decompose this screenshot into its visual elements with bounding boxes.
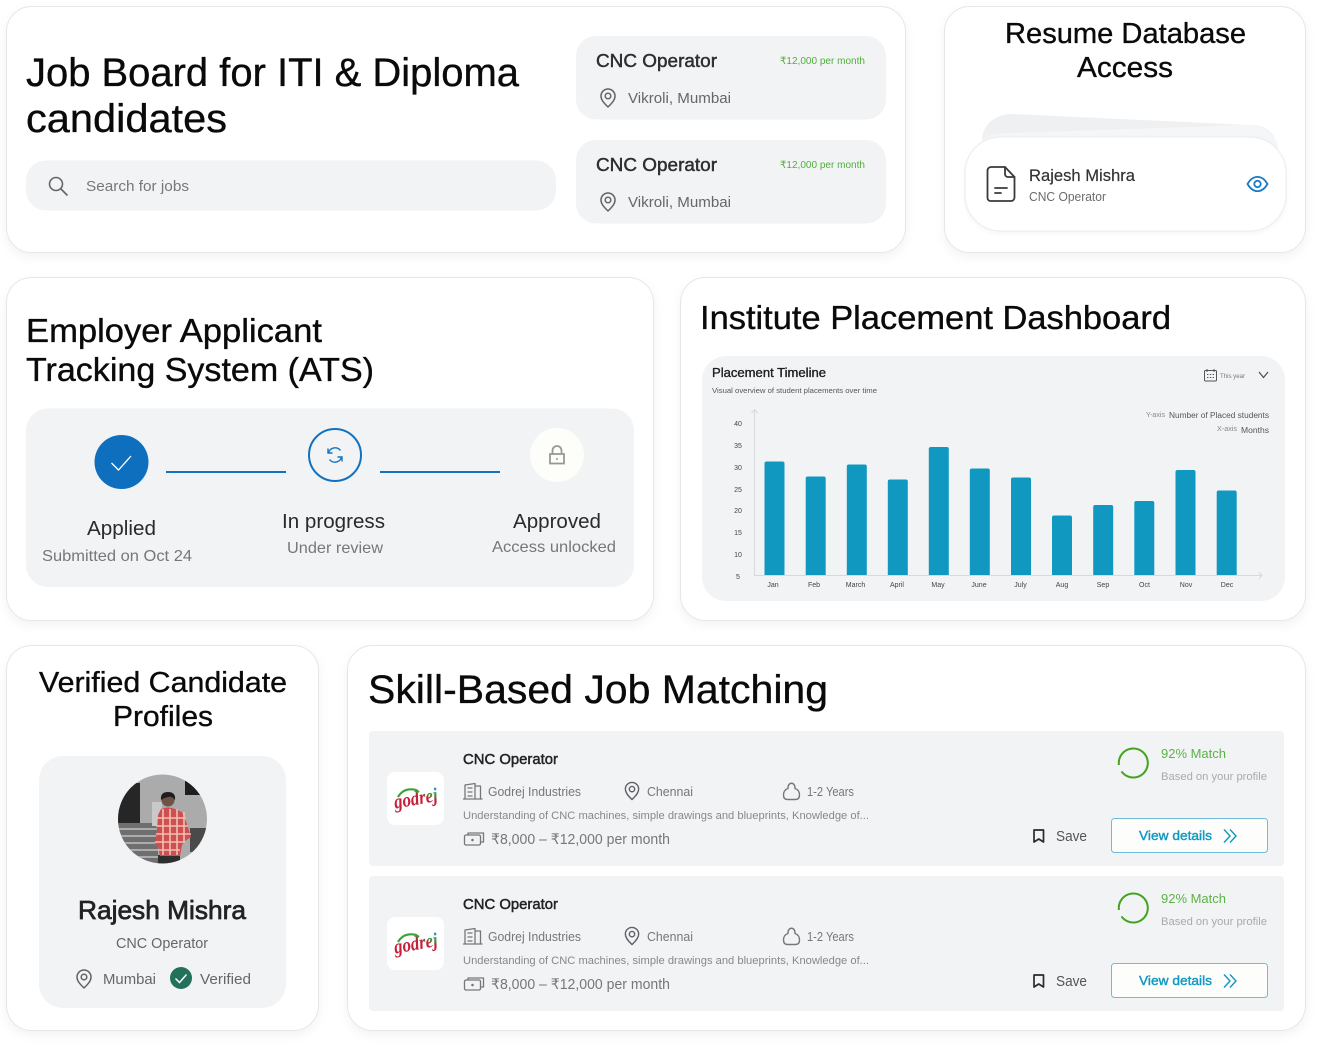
step: in progress [282,429,385,557]
location: Chennai [647,930,693,944]
heading: job board: candidates [26,97,227,141]
heading: resume database: Resume Database [1005,18,1246,50]
bar chart: June [971,582,987,589]
job card 2: Vikroli, Mumbai [628,194,731,211]
heading: job board: Job Board for ITI & Diploma [26,51,520,95]
axis legend: X-axis [1217,426,1238,433]
experience [784,928,854,944]
bar chart: 15 [734,530,742,537]
bar chart: 40 [734,421,742,428]
heading: ATS: Tracking System (ATS) [26,351,374,388]
bar chart: Sep [1097,582,1109,589]
profile card: CNC Operator [116,936,208,952]
connector 1 [166,471,286,473]
resume card: CNC Operator [1029,190,1106,204]
chart title [712,366,877,395]
heading: ATS: Employer Applicant [26,312,322,349]
heading: ATS [26,312,374,388]
location [77,970,156,988]
job card 2: CNC Operator [596,155,717,175]
bar chart: 30 [734,465,742,472]
stacked card backs [982,114,1278,150]
panel: placement dashboard [680,278,1306,620]
save [1034,829,1087,845]
bar chart: 35 [734,443,742,450]
view details button [1112,964,1268,998]
match score [1117,746,1267,783]
chart title: Visual overview of student placements over time [712,386,877,395]
panel: applicant tracking [6,278,654,620]
company logo: godrej [391,784,440,814]
bar chart: Feb [808,582,820,589]
bar chart: May [931,582,945,589]
resume card [965,137,1286,231]
chart title: Placement Timeline [712,366,826,380]
job match row 2 [369,876,1284,1011]
company logo: godrej [391,929,440,959]
save [1034,974,1087,990]
step: approved: Approved [513,511,601,533]
step: in progress: Under review [287,540,383,557]
bar chart: Nov [1180,582,1193,589]
save: Save [1056,974,1087,990]
view details button [1112,818,1268,852]
date filter [1204,369,1268,381]
axis legend: Y-axis [1146,412,1165,419]
description: Understanding of CNC machines, simple drawings and blueprints, Knowledge of... [463,810,869,822]
match score: Based on your profile [1161,916,1267,928]
job match row 1: CNC Operator [463,752,558,768]
step: applied: Submitted on Oct 24 [42,548,192,565]
job card 1: ₹12,000 per month [780,56,865,67]
company: Godrej Industries [488,930,581,944]
location: Mumbai [103,971,156,988]
profile card [39,756,286,1008]
match score: 92% Match [1161,891,1226,906]
bar chart: April [890,582,904,589]
heading: verified profiles: Profiles [113,701,213,733]
experience [784,783,854,800]
icon: document [988,167,1014,201]
profile card: Rajesh Mishra [78,895,247,925]
date filter: This year [1220,374,1245,380]
panel: resume database [944,6,1306,252]
axis legend [1146,411,1269,435]
job card 1 [576,36,886,120]
panel: job board [6,6,906,252]
bar chart: 10 [734,552,742,559]
company logo [387,917,444,970]
heading: resume database: Access [1077,52,1173,84]
search bar: Search for jobs [86,178,189,195]
save: Save [1056,829,1087,845]
location [625,927,693,945]
heading: verified profiles: Verified Candidate [39,667,287,699]
location [625,782,693,800]
connector 2 [380,471,500,473]
match score: 92% Match [1161,746,1226,761]
location: Chennai [647,785,693,799]
description: Understanding of CNC machines, simple drawings and blueprints, Knowledge of... [463,955,869,967]
verified badge: Verified [200,971,251,988]
job card 1: Vikroli, Mumbai [628,90,731,107]
step: applied: Applied [87,518,156,540]
chart panel [702,356,1285,601]
job card 1: CNC Operator [596,51,717,71]
tracker panel [26,408,634,587]
bar chart: July [1014,582,1027,589]
company: Godrej Industries [488,785,581,799]
resume card: Rajesh Mishra [1029,167,1136,185]
salary: ₹8,000 – ₹12,000 per month [491,977,670,993]
heading: resume database [1005,18,1246,84]
bar chart: 20 [734,508,742,515]
job card 2 [576,140,886,224]
match score [1117,891,1267,928]
bar chart: March [846,582,865,589]
match score: Based on your profile [1161,771,1267,783]
step: in progress: In progress [282,511,385,533]
view details button: View details [1139,828,1213,843]
heading: verified profiles [39,667,287,733]
search bar [26,160,556,210]
panel: verified profiles [6,646,318,1030]
icon: eye [1248,177,1268,191]
axis legend: Number of Placed students [1169,411,1269,420]
experience: 1-2 Years [807,930,854,944]
experience: 1-2 Years [807,785,854,799]
bar chart: Jan [767,582,779,589]
heading: job board [26,51,520,141]
step: approved [492,428,616,556]
axis legend: Months [1241,426,1269,435]
bar chart: Aug [1056,582,1068,589]
avatar photo [118,774,208,867]
job card 2: ₹12,000 per month [780,160,865,171]
heading: dashboard: Institute Placement Dashboard [700,299,1171,336]
step: applied [42,435,192,565]
step: approved: Access unlocked [492,539,616,556]
bar chart: 25 [734,487,742,494]
view details button: View details [1139,973,1213,988]
salary: ₹8,000 – ₹12,000 per month [491,832,670,848]
bar chart [734,410,1262,589]
bar chart: Oct [1139,582,1150,589]
company logo [387,772,444,825]
bar chart: 5 [736,574,740,581]
job match row 1 [369,731,1284,866]
bar chart: Dec [1221,582,1234,589]
job match row 2: CNC Operator [463,897,558,913]
panel: skill matching [348,646,1306,1030]
verified badge [170,967,251,989]
heading: skill matching: Skill-Based Job Matching [368,668,828,712]
